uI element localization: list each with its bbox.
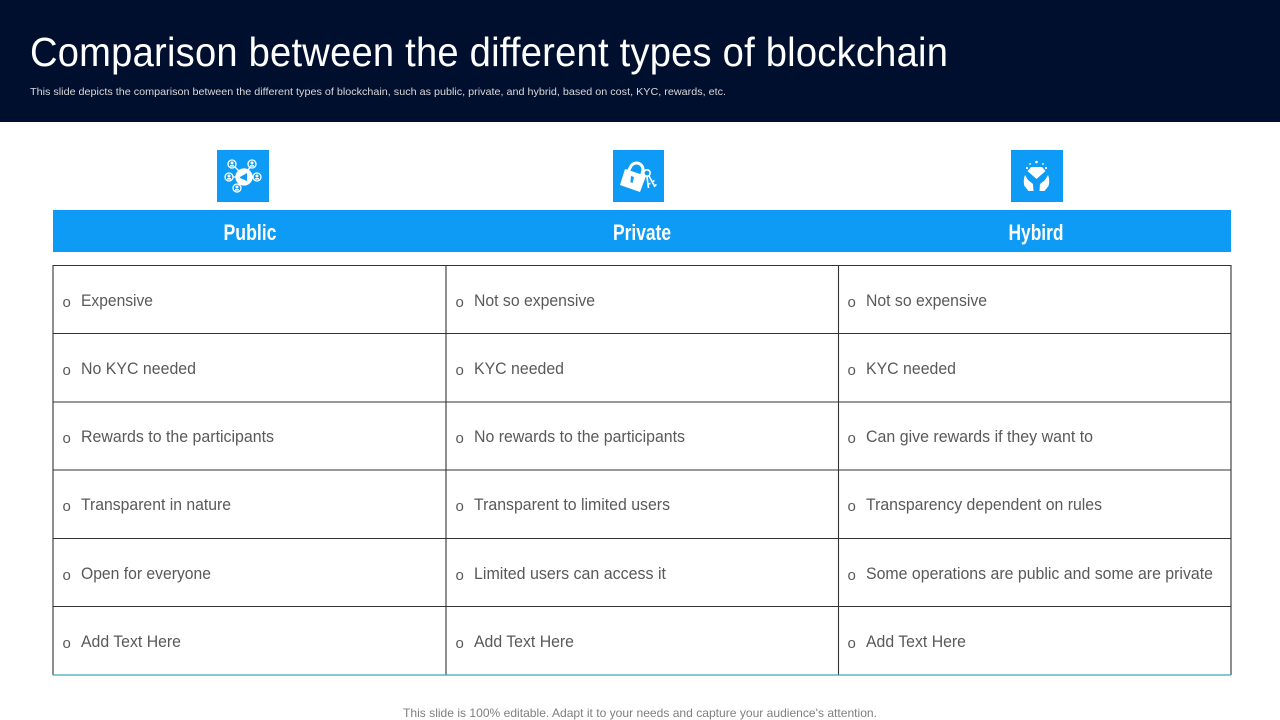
column: Hybird — [848, 292, 1213, 652]
column: Hybird: Add Text Here — [866, 633, 966, 651]
heading: Hybird: Hybird — [1008, 220, 1064, 245]
column: Public: o — [62, 430, 71, 447]
column: Private: o — [456, 430, 464, 447]
title: Comparison between the different types of blockchain — [30, 30, 948, 75]
column: Private — [456, 292, 685, 652]
column: Hybird: o — [848, 362, 856, 379]
column: Private: o — [456, 362, 464, 379]
column: Public: o — [62, 567, 71, 584]
column: Private: Transparent to limited users — [474, 496, 670, 514]
column: Private: o — [456, 294, 464, 311]
column: Public: Expensive — [81, 292, 153, 310]
icon: private lock and keys — [613, 150, 664, 202]
column: Public: o — [62, 498, 71, 515]
column: Public: No KYC needed — [81, 360, 196, 378]
heading: Private: Private — [613, 220, 671, 245]
column: Private: Not so expensive — [474, 292, 595, 310]
column: Private: Add Text Here — [474, 633, 574, 651]
column: Public: o — [62, 362, 71, 379]
column: Hybird: o — [848, 635, 856, 652]
comparison table — [53, 265, 1231, 675]
column: Hybird: o — [848, 498, 856, 515]
table header bar — [53, 210, 1231, 252]
column: Public: Transparent in nature — [81, 496, 231, 514]
column: Public: Rewards to the participants — [81, 428, 274, 446]
column: Hybird: o — [848, 294, 856, 311]
icon: hybrid diamond in hands — [1011, 150, 1063, 202]
column: Private: KYC needed — [474, 360, 564, 378]
column: Hybird: Some operations are public and some are private — [866, 565, 1213, 583]
column: Private: o — [456, 635, 464, 652]
column: Hybird: KYC needed — [866, 360, 956, 378]
header band — [0, 0, 1280, 122]
column: Private: o — [456, 567, 464, 584]
icon: public network — [217, 150, 269, 202]
column: Public: Open for everyone — [81, 565, 211, 583]
heading: Public: Public — [224, 220, 276, 245]
column: Hybird: Not so expensive — [866, 292, 987, 310]
column: Private: No rewards to the participants — [474, 428, 685, 446]
subtitle: This slide depicts the comparison between the different types of blockchain, such as public, private, and hybrid, based on cost, KYC, rewards, etc. — [30, 86, 726, 98]
column: Hybird: Can give rewards if they want to — [866, 428, 1093, 446]
column: Public: o — [62, 294, 71, 311]
footer note: This slide is 100% editable. Adapt it to your needs and capture your audience's attention. — [403, 706, 877, 720]
column: Private: o — [456, 498, 464, 515]
column: Public — [62, 292, 274, 652]
column: Public: Add Text Here — [81, 633, 181, 651]
column: Hybird: o — [848, 567, 856, 584]
column: Public: o — [62, 635, 71, 652]
column: Private: Limited users can access it — [474, 565, 666, 583]
column: Hybird: o — [848, 430, 856, 447]
column: Hybird: Transparency dependent on rules — [866, 496, 1102, 514]
